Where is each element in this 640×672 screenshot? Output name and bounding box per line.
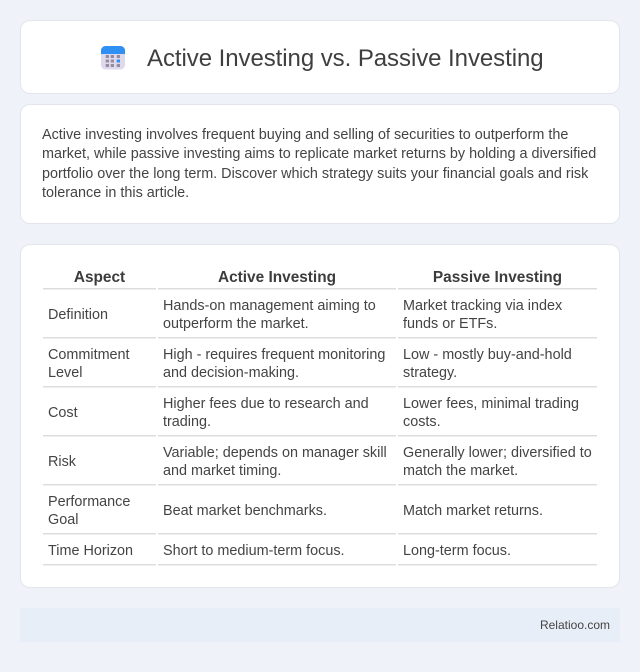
cell: Cost active: trading. bbox=[163, 414, 211, 430]
row: Performance Goal bbox=[48, 494, 130, 528]
title: Active Investing vs. Passive Investing bbox=[147, 45, 544, 72]
cell: Definition passive: funds or ETFs. bbox=[403, 316, 497, 332]
header: Aspect: Aspect bbox=[74, 269, 125, 286]
cell: Risk passive: Generally lower; diversified to bbox=[403, 445, 592, 461]
cell: Risk passive: match the market. bbox=[403, 463, 518, 479]
icon: calendar bbox=[101, 46, 125, 70]
footer bbox=[20, 608, 620, 642]
cell: Commitment passive: strategy. bbox=[403, 365, 457, 381]
header: Passive Investing: Passive Investing bbox=[433, 269, 562, 286]
cell: Cost passive: costs. bbox=[403, 414, 441, 430]
cell: Risk passive bbox=[403, 445, 592, 479]
cell: Definition active: Hands-on management aiming to bbox=[163, 298, 376, 314]
cell: Definition active bbox=[163, 298, 376, 332]
cell: Commitment active: High - requires frequent monitoring bbox=[163, 347, 385, 363]
row: Commitment Level bbox=[48, 347, 130, 381]
text block: introduction: Active investing involves frequent buying and selling of securities to outperform the bbox=[42, 127, 568, 143]
cell: Risk active: and market timing. bbox=[163, 463, 281, 479]
table: comparison bbox=[43, 269, 597, 566]
row: Performance Goal: Goal bbox=[48, 512, 78, 528]
row: Commitment Level: Level bbox=[48, 365, 82, 381]
cell: Commitment active bbox=[163, 347, 385, 381]
cell: Risk active bbox=[163, 445, 387, 479]
text block: introduction: tolerance in this article. bbox=[42, 185, 189, 201]
row: Time Horizon: Time Horizon bbox=[48, 543, 133, 559]
row: Commitment Level: Commitment bbox=[48, 347, 130, 363]
cell: Commitment active: and decision-making. bbox=[163, 365, 299, 381]
cell: Risk active: Variable; depends on manager skill bbox=[163, 445, 387, 461]
cell: Performance passive: Match market returns. bbox=[403, 503, 543, 519]
row: Definition: Definition bbox=[48, 307, 108, 323]
cell: Commitment passive bbox=[403, 347, 572, 381]
cell: Definition passive: Market tracking via index bbox=[403, 298, 562, 314]
header: Active Investing: Active Investing bbox=[218, 269, 336, 286]
cell: Cost passive: Lower fees, minimal trading bbox=[403, 396, 579, 412]
panel: comparison table bbox=[20, 244, 620, 588]
text block: introduction bbox=[42, 127, 596, 201]
row: Cost: Cost bbox=[48, 405, 78, 421]
cell: Cost active bbox=[163, 396, 369, 430]
panel: title bbox=[20, 20, 620, 94]
footer credit: Relatioo.com bbox=[540, 618, 610, 632]
cell: Commitment passive: Low - mostly buy-and-hold bbox=[403, 347, 572, 363]
cell: Definition active: outperform the market. bbox=[163, 316, 309, 332]
row: Risk: Risk bbox=[48, 454, 76, 470]
cell: Time passive: Long-term focus. bbox=[403, 543, 511, 559]
cell: Cost passive bbox=[403, 396, 579, 430]
row: Performance Goal: Performance bbox=[48, 494, 130, 510]
cell: Time active: Short to medium-term focus. bbox=[163, 543, 345, 559]
text block: introduction: portfolio over the long term. Discover which strategy suits your financial goals and risk bbox=[42, 166, 588, 182]
cell: Definition passive bbox=[403, 298, 562, 332]
text block: introduction: market, while passive investing aims to replicate market returns by holding a diversified bbox=[42, 146, 596, 162]
cell: Cost active: Higher fees due to research and bbox=[163, 396, 369, 412]
panel: introduction bbox=[20, 104, 620, 224]
cell: Performance active: Beat market benchmarks. bbox=[163, 503, 327, 519]
